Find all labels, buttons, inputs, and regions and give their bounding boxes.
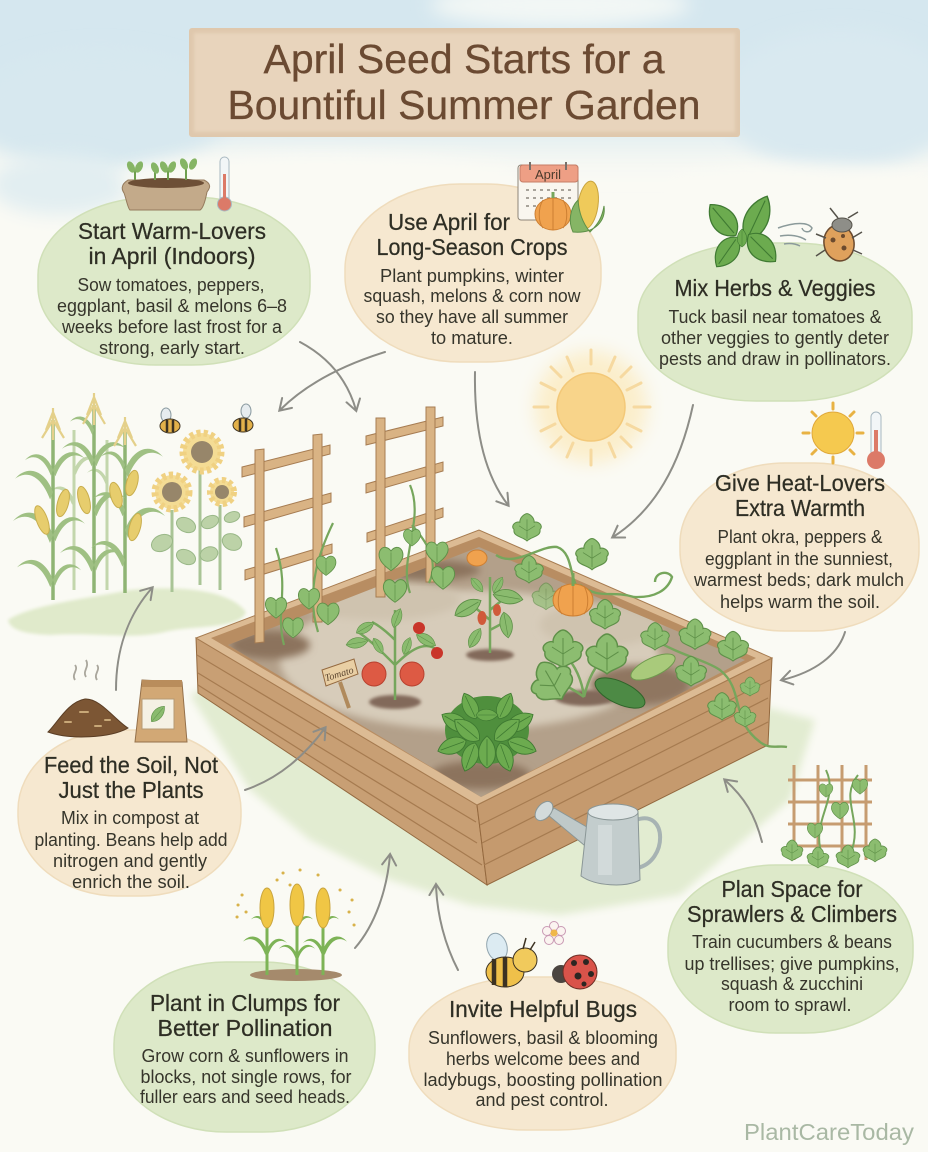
sun illustration <box>534 350 650 465</box>
body text: Tuck basil near tomatoes & <box>668 307 882 327</box>
plant marker sign: Tomato <box>323 665 355 684</box>
bed rim <box>196 530 772 805</box>
left trellis <box>242 434 332 643</box>
body text: warmest beds; dark mulch <box>693 570 904 590</box>
heading: Long-Season Crops <box>376 234 568 260</box>
climbing bean vines <box>265 485 455 645</box>
body text: Train cucumbers & beans <box>692 932 892 952</box>
body text: fuller ears and seed heads. <box>140 1087 350 1107</box>
body text: Plant pumpkins, winter <box>380 266 564 286</box>
body text: Plant okra, peppers & <box>718 527 882 547</box>
inner wall <box>211 537 756 797</box>
pale back corn <box>50 430 107 590</box>
pepper plant <box>451 575 524 653</box>
heading: Feed the Soil, Not <box>44 752 219 778</box>
body text: eggplant, basil & melons 6–8 <box>57 296 287 316</box>
panel: feed the soil <box>18 730 241 896</box>
body text <box>693 527 904 612</box>
icon: small sun and thermometer <box>803 403 885 469</box>
corn stalks <box>13 405 165 600</box>
tomato plant with sign <box>322 607 443 708</box>
panel: use April for long-season crops <box>345 184 601 362</box>
panel: plant in clumps <box>114 962 375 1132</box>
arrows <box>116 342 845 970</box>
title banner: Bountiful Summer Garden <box>228 82 700 128</box>
panel: plan space for sprawlers <box>668 865 913 1033</box>
heading: Just the Plants <box>58 777 204 803</box>
panel: invite helpful bugs <box>409 977 676 1130</box>
title banner <box>189 28 740 137</box>
raised garden bed <box>196 530 772 885</box>
heading: Invite Helpful Bugs <box>449 996 637 1022</box>
heading: Mix Herbs & Veggies <box>674 275 876 301</box>
body text: up trellises; give pumpkins, <box>684 954 900 974</box>
icon: trellis with vines <box>781 765 887 868</box>
body text: Sow tomatoes, peppers, <box>78 275 264 295</box>
body text: pests and draw in pollinators. <box>659 349 891 369</box>
heading: Better Pollination <box>158 1015 332 1041</box>
bees <box>160 408 180 433</box>
heading <box>715 470 885 521</box>
icon: flower <box>542 922 566 944</box>
ground wash <box>190 640 815 915</box>
body text: Sunflowers, basil & blooming <box>428 1028 658 1048</box>
cucumber vine <box>627 619 787 747</box>
body text: ladybugs, boosting pollination <box>424 1070 662 1090</box>
body text: eggplant in the sunniest, <box>705 549 893 569</box>
body text <box>659 307 891 369</box>
watering can <box>532 798 660 885</box>
bed right wall <box>477 658 772 885</box>
basil plant <box>435 690 539 774</box>
heading <box>687 876 897 927</box>
heading <box>376 209 568 260</box>
body text: other veggies to gently deter <box>661 328 889 348</box>
body text <box>34 808 228 892</box>
body text: planting. Beans help add <box>34 830 228 850</box>
body text: so they have all summer <box>376 307 568 327</box>
body text: herbs welcome bees and <box>446 1049 640 1069</box>
heading: Start Warm-Lovers <box>78 218 266 244</box>
body text: nitrogen and gently <box>53 851 207 871</box>
icon: corn clump with pollen <box>237 870 354 981</box>
watermark: PlantCareToday: PlantCareToday <box>744 1119 915 1145</box>
icon: seed tray with thermometer <box>122 157 232 211</box>
heading <box>150 990 340 1041</box>
corn ears <box>32 469 144 542</box>
right trellis <box>366 407 443 597</box>
heading: Give Heat-Lovers <box>715 470 885 496</box>
body text: strong, early start. <box>99 338 245 358</box>
body text <box>140 1046 352 1107</box>
soil <box>220 540 750 800</box>
icon: ladybug <box>552 955 597 989</box>
icon: basil, wind and beetle <box>701 191 862 273</box>
heading: in April (Indoors) <box>88 243 256 269</box>
corn and sunflowers at left <box>13 393 253 600</box>
body text: Mix in compost at <box>61 808 199 828</box>
body text <box>364 266 581 348</box>
pumpkin vine <box>467 514 672 629</box>
panel: mix herbs and veggies <box>638 243 912 401</box>
icon: bee <box>484 931 537 987</box>
body text: and pest control. <box>476 1090 608 1110</box>
body text <box>424 1028 662 1110</box>
heading: Extra Warmth <box>735 495 865 521</box>
panel: give heat-lovers extra warmth <box>680 463 919 631</box>
body text: squash, melons & corn now <box>364 286 581 306</box>
heading: Plant in Clumps for <box>150 990 340 1016</box>
body text: to mature. <box>431 328 513 348</box>
body text: enrich the soil. <box>72 872 190 892</box>
heading: Use April for <box>388 209 510 235</box>
body text: Grow corn & sunflowers in <box>142 1046 348 1066</box>
icon: compost pile and seed bag <box>48 660 187 742</box>
heading <box>78 218 266 269</box>
panel: start warm-lovers <box>38 197 310 365</box>
heading: Sprawlers & Climbers <box>687 901 897 927</box>
heading: Plan Space for <box>722 876 863 902</box>
sunflowers <box>149 433 244 592</box>
body text: weeks before last frost for a <box>61 317 283 337</box>
body text <box>57 275 287 358</box>
bed left wall <box>196 638 487 885</box>
body text: blocks, not single rows, for <box>140 1067 352 1087</box>
body text <box>684 932 900 1015</box>
body text: room to sprawl. <box>728 995 852 1015</box>
corn tassels <box>42 393 136 446</box>
icon: calendar, pumpkin and corn <box>518 162 604 232</box>
heading <box>44 752 219 803</box>
icon: calendar, pumpkin and corn: April <box>535 167 561 182</box>
title banner: April Seed Starts for a <box>264 36 665 82</box>
body text: helps warm the soil. <box>720 592 880 612</box>
zucchini plant <box>522 630 649 714</box>
body text: squash & zucchini <box>721 974 863 994</box>
